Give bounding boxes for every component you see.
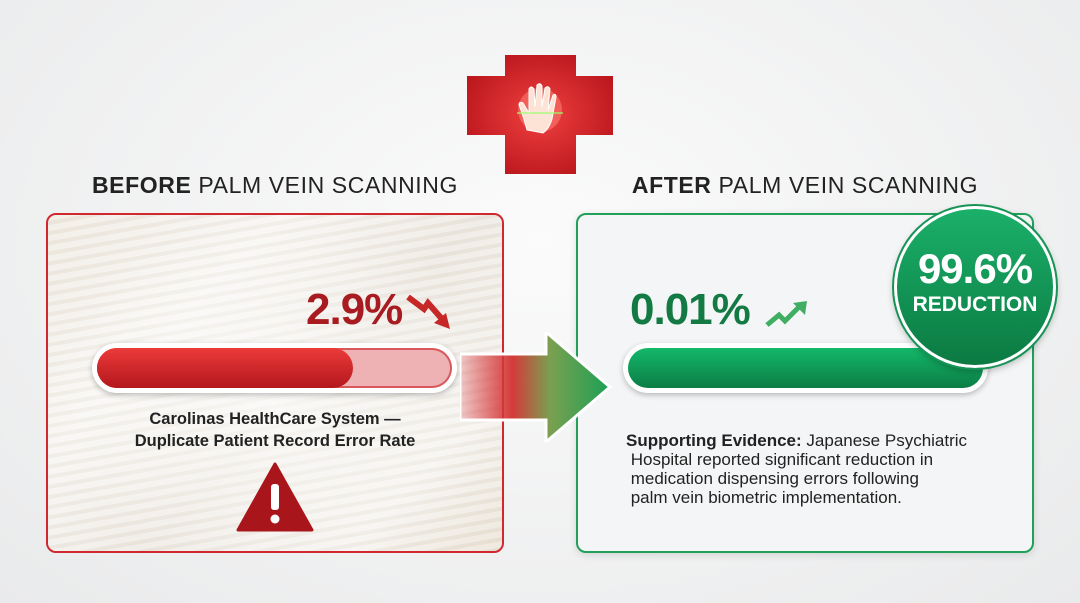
icon: warning: [236, 462, 314, 532]
icon: red cross with palm: [467, 55, 613, 174]
text: supporting evidence: [626, 431, 967, 507]
stat: 0.01%: 0.01%: [630, 285, 750, 334]
stat: 0.01%: [630, 285, 807, 334]
bar: before: [92, 343, 457, 393]
panel: after: [576, 213, 1034, 553]
text: supporting evidence: medication dispensing errors following: [631, 469, 919, 488]
caption: Carolinas HealthCare System —: [149, 410, 401, 428]
arrow: before to after: [460, 335, 612, 442]
panel: before: [46, 213, 504, 553]
icon: down arrow: [406, 294, 450, 329]
stat: 2.9%: 2.9%: [306, 285, 402, 334]
badge: 99.6% reduction: 99.6%: [918, 245, 1032, 292]
text: supporting evidence: Hospital reported significant reduction in: [631, 450, 933, 469]
heading: before: BEFORE PALM VEIN SCANNING: [92, 172, 458, 198]
heading: after: AFTER PALM VEIN SCANNING: [632, 172, 978, 198]
text: supporting evidence: palm vein biometric implementation.: [631, 488, 902, 507]
bar: after: [623, 343, 988, 393]
badge: 99.6% reduction: [894, 206, 1056, 368]
caption: [135, 410, 415, 450]
badge: 99.6% reduction: REDUCTION: [913, 293, 1037, 316]
stat: 2.9%: [306, 285, 450, 334]
icon: up arrow: [766, 301, 807, 327]
caption: Duplicate Patient Record Error Rate: [135, 432, 415, 450]
text: supporting evidence: Supporting Evidence: Japanese Psychiatric: [626, 431, 967, 450]
